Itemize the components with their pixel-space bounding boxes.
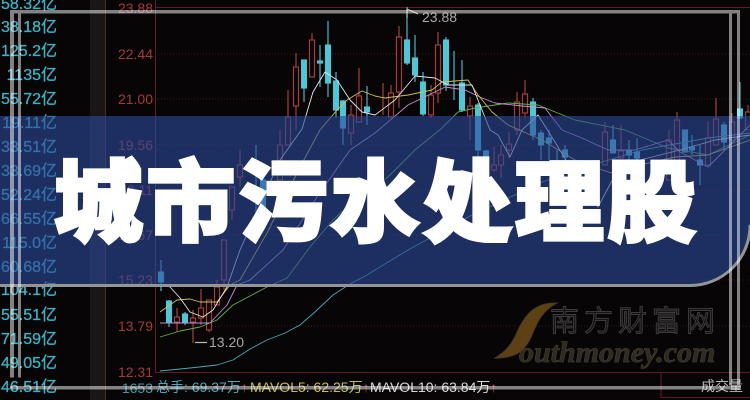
left column: turnover values: 115.0亿 <box>2 234 57 252</box>
title banner panel <box>0 116 750 286</box>
cyan candlesticks <box>158 7 742 327</box>
volume legend row <box>156 378 743 395</box>
left column: turnover values: 33.51亿 <box>1 138 57 156</box>
volume legend row: 总手: 69.37万↑ <box>156 379 248 395</box>
left column: turnover values: 49.05亿 <box>1 354 57 372</box>
price axis labels: 1653 <box>122 380 153 396</box>
title: 城市污水处理股 <box>54 154 699 254</box>
watermark: southmoney logo: 南方财富网 <box>550 305 720 338</box>
left column: turnover values: 104.1亿 <box>1 281 57 299</box>
left column: turnover values: 33.69亿 <box>1 162 57 180</box>
volume legend row: MAVOL10: 63.84万↑ <box>370 379 497 395</box>
left column: turnover values: 125.2亿 <box>1 42 57 60</box>
price axis labels: 19.56 <box>118 137 153 153</box>
left column: turnover values: 71.59亿 <box>1 330 57 348</box>
high price marker: 23.88 <box>422 9 457 25</box>
left column: turnover values <box>1 0 57 396</box>
volume legend row: MAVOL5: 62.25万↑ <box>250 379 370 395</box>
left column: turnover values: 52.24亿 <box>1 186 57 204</box>
high price marker <box>407 9 457 25</box>
watermark: southmoney logo <box>495 303 720 369</box>
price axis labels: 22.44 <box>118 46 153 62</box>
red candlesticks <box>174 26 750 343</box>
left column: turnover values: 1135亿 <box>7 66 57 84</box>
left column: turnover values: 38.18亿 <box>1 18 57 36</box>
price axis labels: 12.31 <box>118 364 153 380</box>
left column: turnover values: 55.72亿 <box>1 90 57 108</box>
price axis labels: 18.11 <box>119 182 153 198</box>
line: MA10 yellow <box>160 80 750 312</box>
price axis labels: 16.67 <box>118 227 153 243</box>
left column: turnover values: 19.11亿 <box>2 114 57 132</box>
banner border <box>0 225 750 286</box>
left column: turnover values: 60.68亿 <box>1 258 57 276</box>
left column: turnover values: 55.51亿 <box>1 306 57 324</box>
price axis labels: 13.79 <box>118 318 153 334</box>
moving average lines <box>160 72 750 371</box>
left column: turnover values: 66.55亿 <box>1 210 57 228</box>
price axis labels: 15.23 <box>118 272 153 288</box>
low price marker: 13.20 <box>209 334 244 350</box>
price axis labels <box>118 0 153 396</box>
volume legend row: 成交量 <box>701 378 743 394</box>
line: MA5 white <box>163 72 750 317</box>
watermark: southmoney logo: outhmoney.com <box>519 336 715 369</box>
line: MA30 green <box>160 103 750 337</box>
line: MA60 teal <box>160 133 750 371</box>
line: MA20 purple <box>160 87 750 323</box>
left column: turnover values: 46.51亿 <box>1 378 57 396</box>
price axis labels: 23.88 <box>118 0 153 16</box>
price axis labels: 21.00 <box>118 91 153 107</box>
